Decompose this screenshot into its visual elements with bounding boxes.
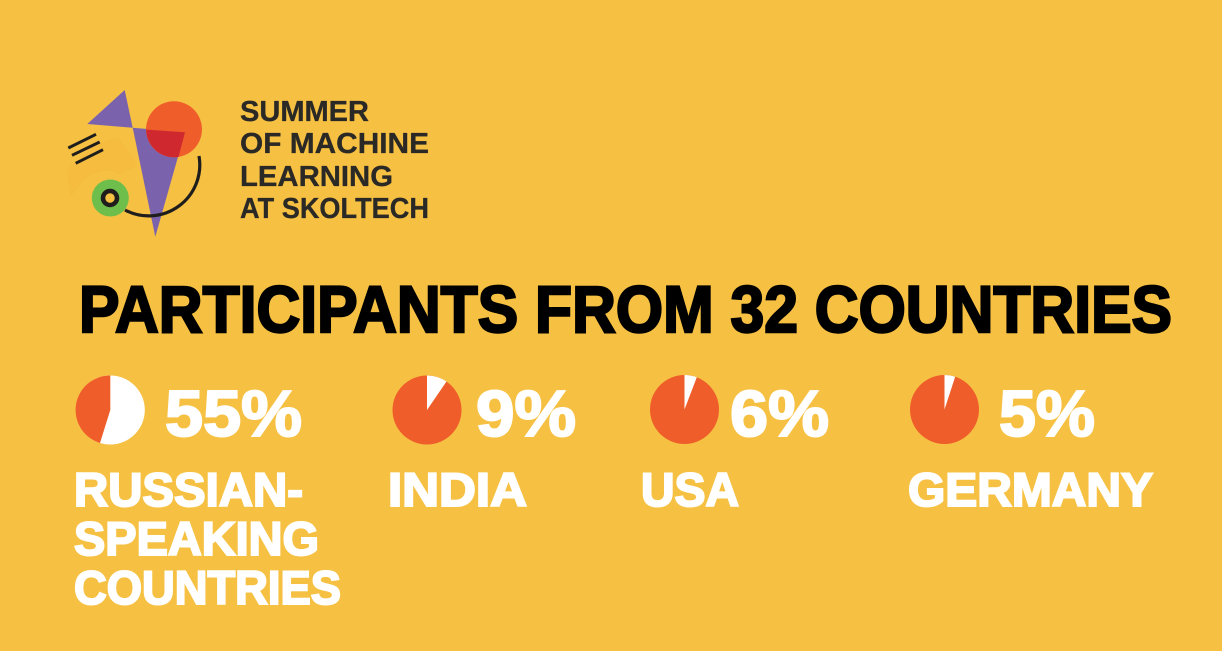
pie chart: 55% — [76, 375, 145, 444]
logo text: LEARNING — [240, 161, 393, 193]
label: Russian-speaking countries: SPEAKING — [74, 512, 319, 565]
label: Russian-speaking countries: RUSSIAN- — [74, 463, 303, 516]
logo text: AT SKOLTECH — [240, 193, 429, 225]
label: Germany: GERMANY — [908, 463, 1153, 516]
pie chart: 9% — [392, 375, 462, 444]
label: Russian-speaking countries: COUNTRIES — [74, 561, 341, 614]
value: 9%: 9% — [476, 377, 576, 450]
label: USA: USA — [641, 463, 739, 516]
stat: Germany — [908, 375, 1153, 516]
pie chart: 6% — [650, 375, 719, 444]
value: 6%: 6% — [730, 377, 829, 450]
stat: USA — [641, 375, 829, 516]
value: 55%: 55% — [165, 377, 302, 450]
stat: India — [388, 375, 576, 516]
stat: Russian-speaking countries — [74, 375, 341, 614]
logo text: OF MACHINE — [240, 128, 429, 160]
value: 5%: 5% — [999, 377, 1095, 450]
logo text — [240, 96, 429, 225]
logo text: SUMMER — [240, 96, 369, 128]
pie chart: 5% — [910, 375, 979, 444]
label: Russian-speaking countries — [74, 463, 341, 614]
icon: abstract logo mark — [67, 90, 202, 237]
label: India: INDIA — [388, 463, 527, 516]
logo — [67, 90, 429, 237]
